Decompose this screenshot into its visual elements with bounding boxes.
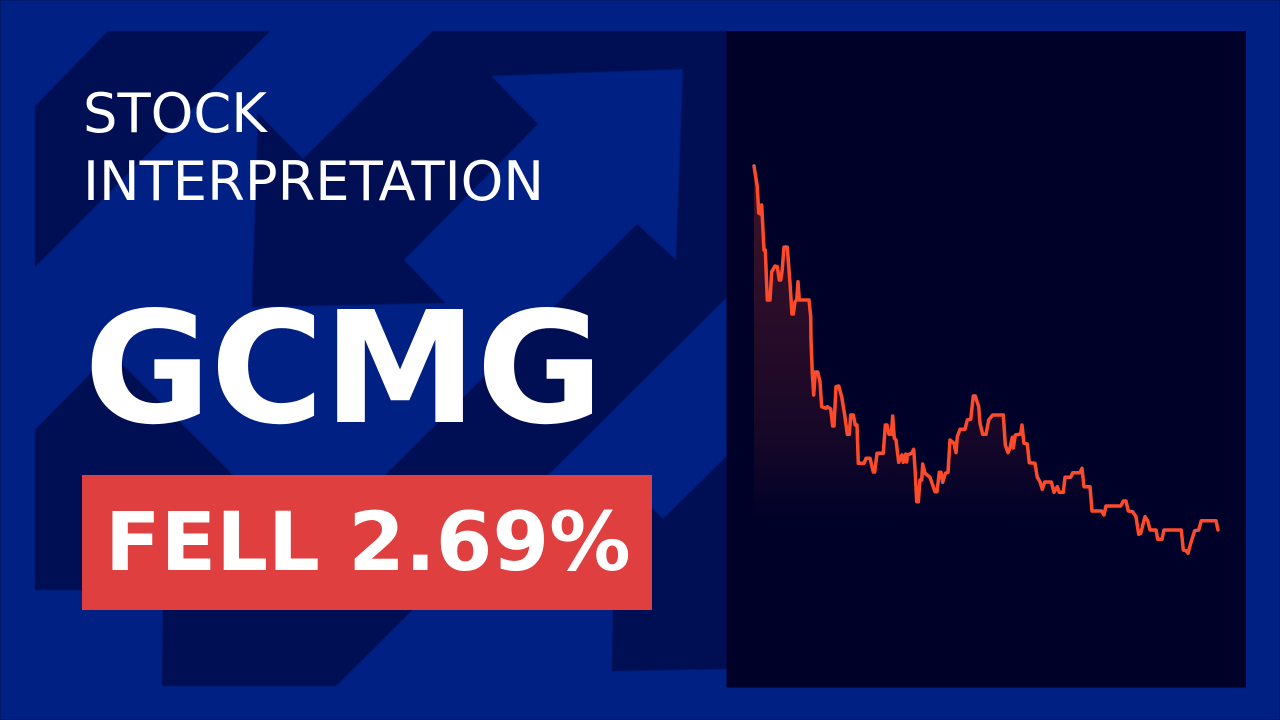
price line [754,166,1218,553]
badge: price change [82,475,652,610]
data point markers [753,164,1197,531]
badge: price change: FELL 2.69% [105,495,631,590]
text: INTERPRETATION [83,150,544,213]
ticker symbol: GCMG [84,278,602,459]
chart area fill [754,166,1139,522]
text: STOCK [83,82,267,145]
heading: stock interpretation [83,82,544,213]
